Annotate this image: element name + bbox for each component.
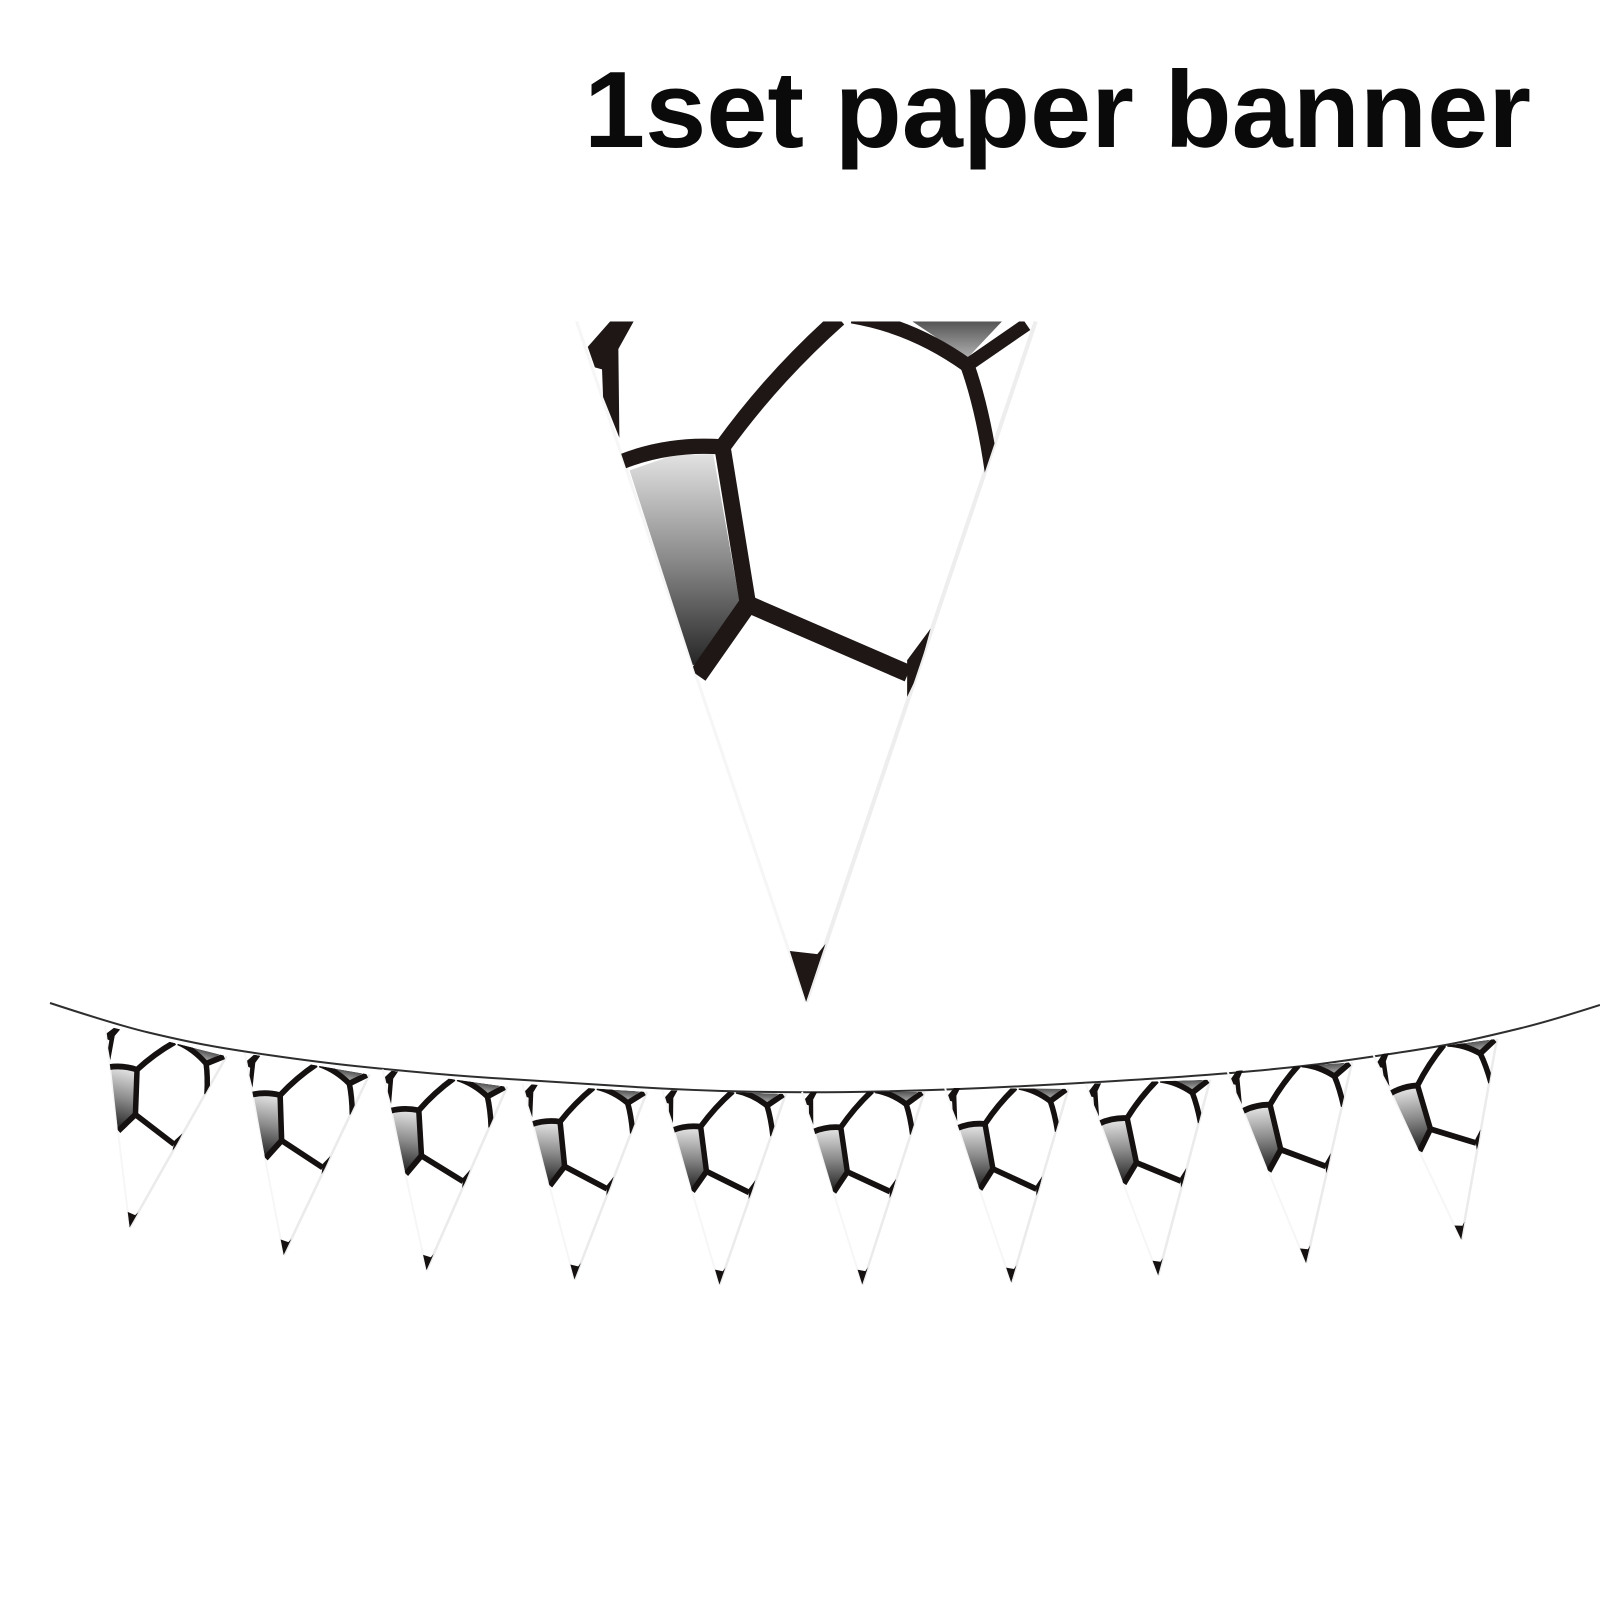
pennant 5 <box>658 1088 786 1287</box>
large pennant with soccer ball pattern <box>577 316 1036 1002</box>
pennant 4 <box>512 1082 647 1284</box>
pennant 10 <box>1373 1037 1523 1248</box>
string <box>50 1003 1600 1092</box>
pennant 1 <box>69 1024 227 1243</box>
pennant 8 <box>1086 1078 1220 1278</box>
banner with ten small pennants on a string <box>50 1003 1600 1287</box>
pennant 6 <box>801 1090 925 1285</box>
pennant 7 <box>945 1086 1073 1283</box>
pennant 3 <box>364 1068 507 1279</box>
title: 1set paper banner <box>584 49 1531 171</box>
pennant 9 <box>1227 1061 1368 1268</box>
pennant 2 <box>221 1052 370 1266</box>
